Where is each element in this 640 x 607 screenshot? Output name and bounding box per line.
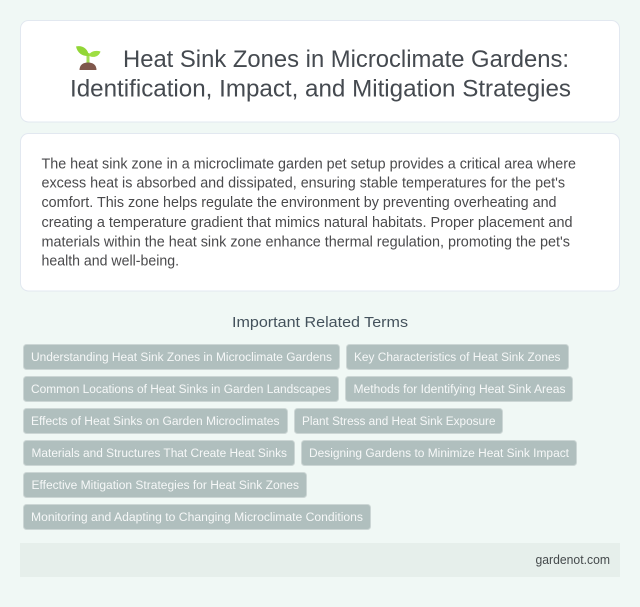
- chip: identifying methods: Methods for Identifying Heat Sink Areas: [354, 382, 566, 396]
- heading: important related terms: Important Related Terms: [232, 314, 408, 331]
- chip: materials and structures: Materials and Structures That Create Heat Sinks: [32, 446, 287, 460]
- panel: description card: [20, 134, 620, 291]
- chip: common locations: Common Locations of Heat Sinks in Garden Landscapes: [31, 382, 331, 396]
- chip: mitigation strategies: Effective Mitigation Strategies for Heat Sink Zones: [32, 478, 299, 492]
- chip: plant stress: Plant Stress and Heat Sink Exposure: [302, 414, 496, 428]
- text block: description: [42, 156, 576, 270]
- chip: materials and structures: [24, 440, 294, 466]
- text block: description: materials within the heat sink zone enhance thermal regulation, promoting the pet's: [42, 234, 570, 250]
- chip: common locations: [24, 376, 338, 402]
- chip: designing gardens: Designing Gardens to Minimize Heat Sink Impact: [309, 446, 570, 460]
- footer: gardenot.com: [536, 552, 610, 567]
- text block: description: excess heat is absorbed and dissipated, ensuring stable temperatures for the pet's: [42, 176, 565, 192]
- text block: description: creating a temperature gradient that mimics natural habitats. Proper placement and: [42, 215, 572, 231]
- chip: effects on microclimates: [24, 408, 288, 434]
- icon: seedling: [76, 46, 100, 70]
- chip: understanding heat sink zones: [24, 344, 340, 370]
- chip: understanding heat sink zones: Understanding Heat Sink Zones in Microclimate Gardens: [31, 350, 332, 364]
- chip: key characteristics: [346, 344, 568, 370]
- text block: description: health and well-being.: [42, 254, 179, 270]
- title: [70, 46, 571, 102]
- title: Heat Sink Zones in Microclimate Gardens:: [123, 46, 569, 73]
- title: Identification, Impact, and Mitigation Strategies: [70, 76, 571, 102]
- panel: title card: [20, 20, 620, 122]
- text block: description: comfort. This zone helps regulate the environment by preventing overheating and: [42, 195, 556, 211]
- chip: identifying methods: [346, 376, 572, 402]
- chip: monitoring and adapting: Monitoring and Adapting to Changing Microclimate Conditions: [31, 510, 363, 524]
- chip: designing gardens: [302, 440, 576, 466]
- chip: monitoring and adapting: [24, 504, 370, 530]
- chip: plant stress: [294, 408, 502, 434]
- chip: mitigation strategies: [24, 472, 306, 498]
- chip: key characteristics: Key Characteristics of Heat Sink Zones: [354, 350, 560, 364]
- panel: related term chips: [24, 344, 576, 530]
- chip: effects on microclimates: Effects of Heat Sinks on Garden Microclimates: [31, 414, 280, 428]
- text block: description: The heat sink zone in a microclimate garden pet setup provides a critical area where: [42, 156, 576, 172]
- footer: [20, 543, 620, 577]
